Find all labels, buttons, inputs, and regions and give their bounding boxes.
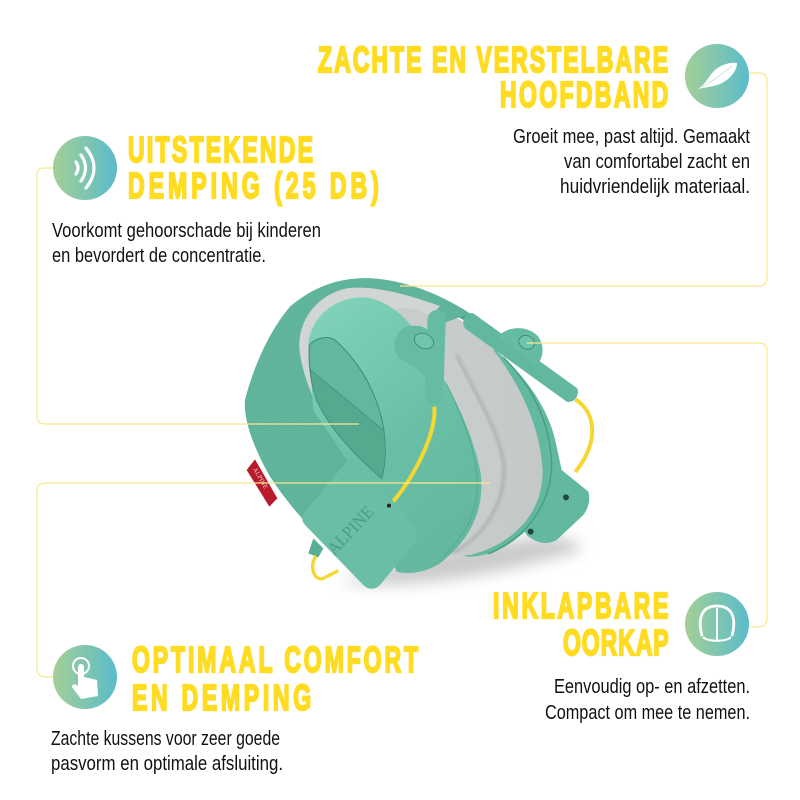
panel: headband feature <box>318 41 750 198</box>
heading: headband: HOOFDBAND <box>500 76 668 115</box>
front arm stem <box>394 310 446 405</box>
panel lower shade <box>311 370 385 478</box>
icon: touching hand <box>53 645 117 709</box>
text: damping description <box>52 220 321 267</box>
end cap body <box>302 460 417 589</box>
product: folded Alpine earmuffs <box>245 278 592 589</box>
icon: feather <box>685 44 749 108</box>
heading: damping <box>128 131 379 206</box>
rear yellow wire <box>575 399 592 472</box>
heading: foldable cup <box>493 587 669 663</box>
recessed outer panel <box>309 338 385 478</box>
rear arm disc <box>500 328 543 365</box>
rear adjustment arm <box>463 313 578 402</box>
front grey cushion <box>395 308 501 554</box>
wire hole <box>387 504 391 508</box>
lower yellow loop <box>313 556 338 579</box>
inner grey headband lining <box>299 288 440 483</box>
text: comfort description <box>51 728 283 775</box>
text: foldable cup description: Eenvoudig op- en afzetten. <box>554 676 750 698</box>
connector lines <box>37 73 767 677</box>
text: damping description: Voorkomt gehoorschade bij kinderen <box>52 220 321 242</box>
rear ear cup <box>453 348 589 557</box>
front cushion shadow <box>452 355 504 554</box>
rear cup screw holes <box>528 494 569 535</box>
icon: folded earmuffs <box>685 592 749 656</box>
heading: comfort <box>132 641 418 718</box>
text: headband description: Groeit mee, past altijd. Gemaakt <box>513 126 750 148</box>
text: foldable cup description: Compact om mee te nemen. <box>545 702 750 724</box>
headband fabric <box>245 278 470 527</box>
text: headband description: huidvriendelijk materiaal. <box>560 176 750 198</box>
front ear cup shell <box>308 297 481 573</box>
panel: comfort feature <box>51 641 418 775</box>
front yellow wire <box>389 407 434 506</box>
red tag label: ALPINE <box>251 466 269 490</box>
heading: damping: UITSTEKENDE <box>128 131 313 170</box>
connector: headband <box>400 73 767 286</box>
rear arm rod <box>463 313 578 402</box>
logo on end cap: ALPINE <box>323 502 378 559</box>
text: comfort description: Zachte kussens voor zeer goede <box>51 728 280 750</box>
text: damping description: en bevordert de concentratie. <box>52 245 266 267</box>
heading: foldable cup: OORKAP <box>563 624 669 663</box>
panel: foldable cup feature <box>493 587 750 724</box>
heading: damping: DEMPING (25 DB) <box>128 167 379 206</box>
front end cap with logo <box>302 460 417 589</box>
rear ear cup edge shading <box>488 357 552 554</box>
text: comfort description: pasvorm en optimale afsluiting. <box>51 753 283 775</box>
text: foldable cup description <box>545 676 750 724</box>
text: headband description <box>513 126 750 198</box>
front arm button <box>412 330 436 352</box>
red fabric tag <box>247 459 277 507</box>
text: headband description: van comfortabel zacht en <box>564 151 750 173</box>
lower stem <box>308 538 323 557</box>
cup rim line <box>443 383 477 557</box>
panel: damping feature <box>52 131 379 267</box>
heading: comfort: EN DEMPING <box>132 679 311 718</box>
connector: comfort <box>37 483 490 677</box>
heading: headband: ZACHTE EN VERSTELBARE <box>318 41 668 80</box>
lower stem and yellow loop <box>308 538 338 579</box>
thin headband strip <box>417 304 473 323</box>
red tag shape <box>247 459 277 507</box>
heading: headband <box>318 41 668 115</box>
front adjustment arm <box>394 310 446 405</box>
connector: damping <box>37 168 359 424</box>
rear grey cushion <box>420 308 543 555</box>
rear arm button <box>517 333 537 352</box>
heading: comfort: OPTIMAAL COMFORT <box>132 641 418 680</box>
connector: foldable cup <box>527 343 767 627</box>
heading: foldable cup: INKLAPBARE <box>493 587 668 626</box>
ground shadow <box>340 537 581 584</box>
icon: sound waves <box>53 136 117 200</box>
